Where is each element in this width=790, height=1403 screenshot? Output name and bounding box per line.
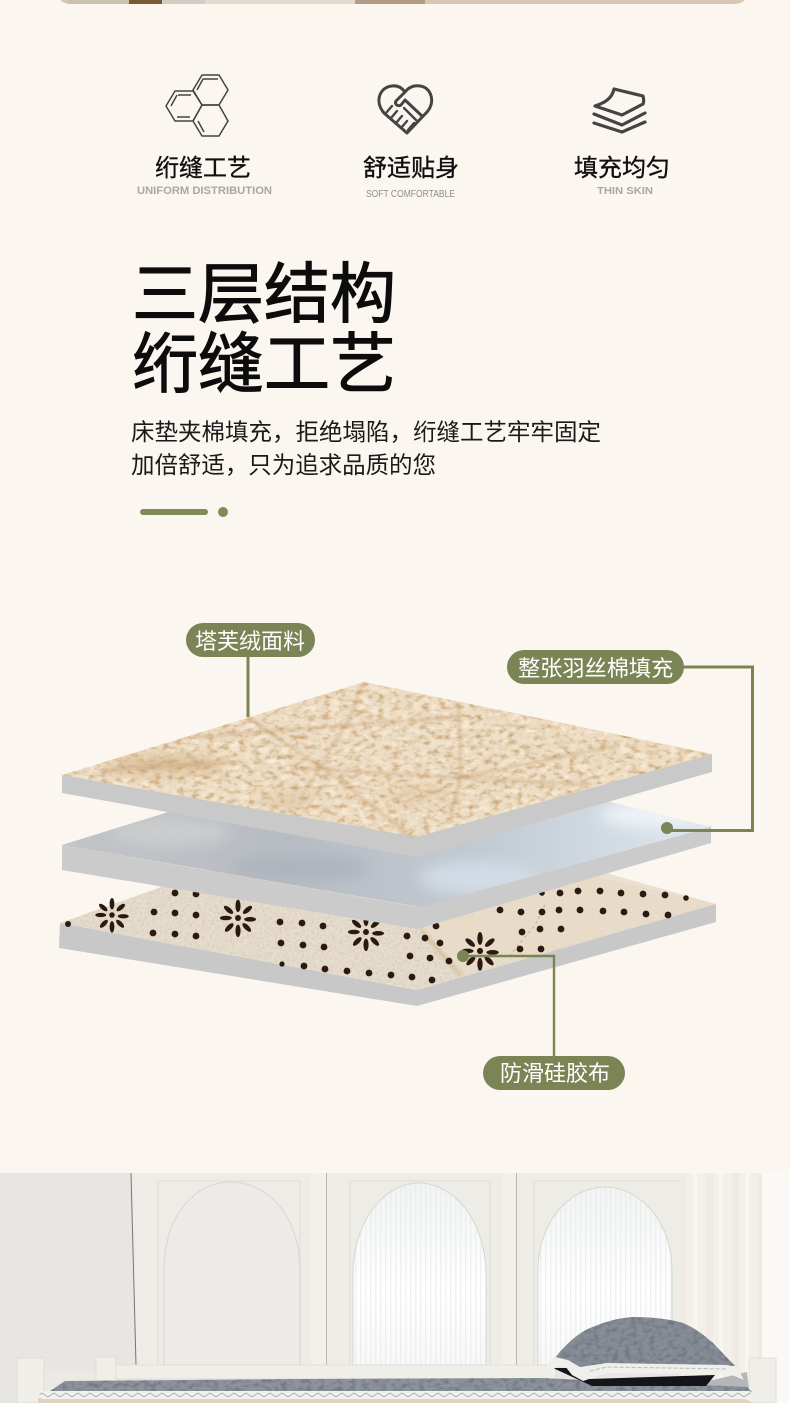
arched window 1 (353, 1183, 486, 1365)
feature: comfort (363, 86, 459, 200)
bedroom photo (0, 1173, 790, 1403)
arched window 2 (538, 1187, 672, 1365)
title: 三层结构 (132, 257, 396, 331)
feature: quilting (137, 75, 272, 197)
bright right edge (762, 1173, 790, 1403)
top photo strip (60, 0, 745, 4)
mat (38, 1378, 754, 1403)
caption: even filling: THIN SKIN (597, 185, 653, 197)
curtain (680, 1173, 762, 1403)
wall (0, 1173, 790, 1403)
description text: 床垫夹棉填充，拒绝塌陷，绗缝工艺牢牢固定 (131, 419, 601, 445)
callout: terry fleece fabric: 塔芙绒面料 (195, 629, 305, 654)
bed frame (17, 1357, 776, 1403)
layer: feather cotton filling (62, 797, 711, 929)
layer: anti-slip silicone fabric (59, 820, 716, 1006)
caption: comfort: SOFT COMFORTABLE (366, 189, 455, 200)
callout: terry fleece fabric (186, 623, 315, 717)
icon: stacked sheets (594, 89, 645, 132)
callout: anti-slip silicone fabric: 防滑硅胶布 (500, 1061, 610, 1086)
description text: 加倍舒适，只为追求品质的您 (131, 452, 436, 478)
caption: quilting: UNIFORM DISTRIBUTION (137, 185, 272, 197)
heading: comfort: 舒适贴身 (363, 155, 459, 182)
arch panel (164, 1182, 300, 1365)
title (132, 257, 396, 401)
heading: quilting: 绗缝工艺 (155, 155, 251, 182)
callout: feather cotton filling (507, 650, 752, 834)
callout: anti-slip silicone fabric (457, 950, 625, 1090)
accent bar and dot (140, 507, 228, 517)
heading: even filling: 填充均匀 (574, 155, 670, 182)
layer: terry fleece fabric (62, 682, 712, 857)
icon: honeycomb (166, 75, 228, 136)
feature: even filling (574, 89, 670, 197)
title: 绗缝工艺 (132, 327, 396, 401)
pillow (546, 1317, 744, 1386)
layer diagram (59, 682, 716, 1006)
paneled doors (131, 1173, 680, 1365)
callout: feather cotton filling: 整张羽丝棉填充 (518, 656, 673, 681)
icon: handshake heart (379, 86, 432, 133)
description text (131, 419, 601, 478)
